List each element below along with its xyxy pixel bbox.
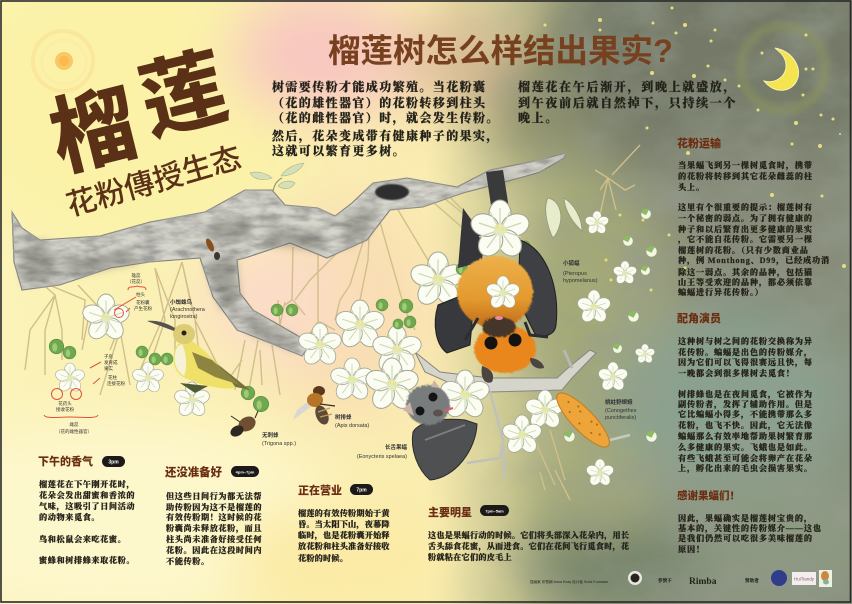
flowers xyxy=(54,211,656,487)
side text: pollen transfer: 的花粉将转移到其它花朵雌蕊的柱 xyxy=(678,171,813,181)
side text: pollen transfer: 这里有个很重要的提示：榴莲树有 xyxy=(678,202,813,212)
illustration: short-nosed fruit bat hanging xyxy=(435,170,557,383)
icon: moon and stars xyxy=(544,6,846,292)
side text: thanks: 是我们仍然可以吃很多美味榴莲的 xyxy=(678,533,813,543)
side text: supporting cast: 花传粉。蝙蝠是出色的传粉媒介， xyxy=(678,347,813,358)
flower part labels xyxy=(56,272,152,435)
species labels: 桃蛀野螟蛾 xyxy=(605,398,633,406)
section: 4pm-7pm: 有效传粉期！这时候的花 xyxy=(166,512,262,522)
footer credits xyxy=(530,570,832,587)
section: 3pm: 下午的香气 xyxy=(38,454,93,468)
section: 4pm-7pm: 粉囊尚未释放花粉，而且 xyxy=(166,523,262,534)
section: 7pm: 昏。当太阳下山，夜幕降 xyxy=(298,519,390,530)
section: 7pm-5am: 7pm–5am xyxy=(485,508,504,514)
subtitle: 花粉傳授生态 xyxy=(63,141,245,223)
green buds xyxy=(49,209,657,442)
species labels xyxy=(170,259,637,460)
side text: supporting cast: 这种树与树之间的花粉交换称为异 xyxy=(678,336,813,346)
main heading: 榴莲树怎么样结出果实? xyxy=(328,33,673,69)
side text: thanks: 基本的，关键性的传粉媒介——这也 xyxy=(678,523,822,534)
flower part labels: 连接花粉 xyxy=(107,380,125,387)
side text: pollen transfer: 当果蝠飞到另一棵树觅食时，携带 xyxy=(678,160,813,171)
side text: pollen transfer: 山王等受欢迎的品种，都必须依靠 xyxy=(678,277,813,288)
side text: supporting cast: 副传粉者，发挥了辅助作用。但是 xyxy=(678,399,813,410)
section: 3pm xyxy=(38,454,138,565)
flower part labels: 果实 xyxy=(104,365,113,372)
branch: main limb xyxy=(12,153,566,356)
flower part labels: 花粉囊 xyxy=(136,299,150,306)
icon: sun xyxy=(33,31,93,91)
species labels: (Eonycteris spelaea) xyxy=(357,454,407,460)
flower part labels: 子房 xyxy=(104,353,113,360)
side text: pollen transfer: 蝙蝠进行异花传粉。） xyxy=(678,287,764,297)
side text: supporting cast: 么多健康的果实。飞蛾也是如此。 xyxy=(678,442,813,453)
branch: lower right twig xyxy=(415,350,630,478)
section: 7pm: 花粉的时候。 xyxy=(298,553,348,563)
side heading: pollen transfer: 花粉运输 xyxy=(677,136,721,150)
side text: thanks: 因此，果蝠确实是榴莲树宝贵的， xyxy=(678,513,813,524)
title xyxy=(41,40,237,188)
flower part labels: 雌蕊 xyxy=(70,421,79,428)
footer credits: 插画家 邓慧娴 Anna Koay 设计者 Suria Kumaran xyxy=(530,579,608,584)
species labels: (Arachnothera xyxy=(170,307,206,313)
title: 榴 xyxy=(41,76,147,188)
species labels: (Conogethes xyxy=(605,408,637,414)
sponsor logos: HuiTiandy xyxy=(794,576,815,582)
flower part labels: （花的雌性器官） xyxy=(56,428,92,435)
section: 3pm: 3pm xyxy=(108,460,119,466)
side text: supporting cast: 因为它们可以飞得很赛远且快，每 xyxy=(678,357,813,368)
species labels: 小狐蝠 xyxy=(563,259,580,267)
section: 3pm: 榴莲花在下午刚开花时， xyxy=(39,479,135,490)
intro text: right column: 到午夜前后就自然掉下，只持续一个 xyxy=(518,95,737,110)
logo: Rimba: Rimba xyxy=(689,577,717,587)
sponsor logos xyxy=(771,570,832,587)
section: 4pm-7pm: 4pm–7pm xyxy=(236,470,255,474)
side text: supporting cast: 有些飞蛾甚至可能会将卵产在花朵 xyxy=(678,453,813,463)
section: 7pm: 正在营业 xyxy=(298,483,342,497)
illustration: cave nectar bat xyxy=(403,380,477,480)
icon: giant honey bee xyxy=(293,386,335,427)
illustration: branches xyxy=(12,153,630,478)
flower part labels: 接收花粉 xyxy=(56,406,74,413)
flower part labels: 花柱 xyxy=(108,374,117,381)
section: 7pm xyxy=(298,483,392,563)
section: 3pm: 气味，这吸引了日间活动 xyxy=(39,501,135,512)
side text: supporting cast: 它比蝙蝠小得多，不能携带那么多 xyxy=(678,409,813,420)
illustration: spider hunter bird xyxy=(147,321,250,393)
section: 4pm-7pm: 但这些日间行为都无法帮 xyxy=(166,491,262,501)
flower part labels: 发育成 xyxy=(104,359,118,366)
section: 7pm-5am xyxy=(428,505,632,562)
section: 7pm: 榴莲的有效传粉期始于黄 xyxy=(298,508,391,518)
side text: pollen transfer: 除这一弱点。其余的品种，包括猫 xyxy=(678,267,813,278)
footer credits: 赞助者 xyxy=(745,577,759,584)
intro text: left column: 这就可以繁育更多树。 xyxy=(272,143,406,158)
icon: ant on branch xyxy=(204,237,220,260)
section: 7pm: 放花粉和柱头准备好接收 xyxy=(298,541,390,551)
side text: pollen transfer: 种子和以后繁育出更多健康的果实 xyxy=(678,224,813,234)
side text: supporting cast: 上，孵化出来的毛虫会损害果实。 xyxy=(678,463,813,474)
intro text: left column: （花的雌性器官）时，就会发生传粉。 xyxy=(272,110,500,125)
illustration: durian moth xyxy=(550,386,616,454)
section: 4pm-7pm: 还没准备好 xyxy=(165,465,223,479)
flower part labels: 雄蕊 xyxy=(132,272,141,279)
section: 7pm-5am: 粉就粘在它们的皮毛上 xyxy=(428,552,512,562)
intro text: right column: 晚上。 xyxy=(518,110,559,125)
icon: white leaves xyxy=(546,198,582,238)
flower part labels: 产生花粉 xyxy=(134,305,152,312)
title: 莲 xyxy=(131,40,237,152)
flowers in front of bat xyxy=(468,200,532,310)
flower part labels: （花蕊） xyxy=(127,278,145,285)
logo: round badge xyxy=(628,571,642,585)
intro text: left column: （花的雄性器官）的花粉转移到柱头 xyxy=(272,95,487,110)
side text: pollen transfer: 榴莲树的花粉。（只有少数商业品 xyxy=(678,245,809,255)
species labels: (Apis dorsata) xyxy=(335,423,369,429)
section: 4pm-7pm: 不能传粉。 xyxy=(166,556,210,566)
section: 3pm: 花朵会发出甜蜜和香浓的 xyxy=(39,490,135,500)
flower part labels: 柱头 xyxy=(136,291,145,298)
side text: supporting cast: 花粉，也飞不快。因此，它无法像 xyxy=(678,420,813,431)
side heading: thanks: 感谢果蝠们！ xyxy=(677,489,740,502)
species labels: 长舌果蝠 xyxy=(385,443,407,451)
section: 7pm-5am: 舌头舔食花蜜，从而进食。它们在花间飞行觅食时，花 xyxy=(428,541,630,552)
icon: sprout leaves xyxy=(250,163,304,192)
side text: thanks: 原因！ xyxy=(678,544,705,554)
side heading: supporting cast: 配角演员 xyxy=(677,311,721,325)
intro text: left column: 然后，花朵变成带有健康种子的果实， xyxy=(272,128,500,143)
flower part diagram xyxy=(44,272,152,435)
side text: supporting cast: 树排蜂也是在夜间觅食，它被作为 xyxy=(678,389,813,400)
section: 3pm: 蜜蜂和树排蜂来取花粉。 xyxy=(39,555,135,565)
footer credits: 参赞于 xyxy=(658,577,672,584)
section: 7pm-5am: 这也是果蝠行动的时候。它们将头部深入花朵内，用长 xyxy=(428,530,629,541)
species labels: (Pteropus xyxy=(563,271,587,277)
species labels: longirostra) xyxy=(170,314,198,320)
section: 3pm: 的动物来觅食。 xyxy=(39,512,100,522)
section: 3pm: 鸟和松鼠会来吃花蜜。 xyxy=(39,534,126,545)
species labels: 树排蜂 xyxy=(335,413,352,421)
section: 7pm: 7pm xyxy=(356,488,367,494)
species labels: hypomelanus) xyxy=(563,278,598,284)
side text: supporting cast: 一晚都会到很多棵树去觅食！ xyxy=(678,368,795,379)
section: 4pm-7pm: 助传粉因为这不是榴莲的 xyxy=(166,502,262,512)
flower part labels: 花药头 xyxy=(58,400,72,407)
icon: stingless bee xyxy=(228,411,258,439)
section: 4pm-7pm: 柱头尚未准备好接受任何 xyxy=(166,534,262,544)
section: 4pm-7pm xyxy=(165,465,265,566)
intro text: right column: 榴莲花在午后渐开，到晚上就盛放， xyxy=(518,79,737,94)
side text: pollen transfer: ，它不能自花传粉。它需要另一棵 xyxy=(678,234,813,245)
side text: pollen transfer: 一个秘密的弱点。为了拥有健康的 xyxy=(678,213,813,223)
flower stalks xyxy=(25,145,640,500)
section: 7pm: 临时，也是花粉囊开始释 xyxy=(298,530,390,541)
species labels: 小蜘蛛鸟 xyxy=(170,298,193,306)
side text: pollen transfer: 头上。 xyxy=(678,182,705,192)
side text: supporting cast: 蝙蝠那么有效率地帮助果树繁育那 xyxy=(678,431,813,442)
section: 7pm-5am: 主要明星 xyxy=(428,505,472,519)
species labels: 无刺蜂 xyxy=(262,431,279,439)
species labels: punctiferalis) xyxy=(605,415,636,421)
intro text: left column: 树需要传粉才能成功繁殖。当花粉囊 xyxy=(272,79,486,94)
side text: pollen transfer: 种，例 Monthong、D99，已经成功消 xyxy=(678,255,830,266)
section: 4pm-7pm: 花粉。因此在这段时间内 xyxy=(166,545,262,555)
species labels: (Trigona spp.) xyxy=(262,441,296,447)
